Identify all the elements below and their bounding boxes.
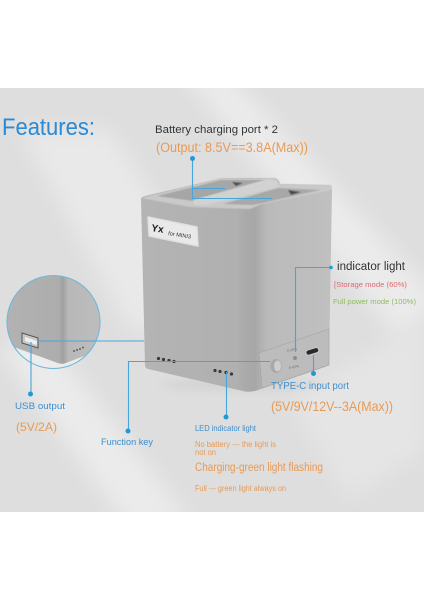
callout dots (28, 156, 333, 434)
callout lines (31, 158, 331, 431)
label: indicator light: indicator light (337, 261, 406, 273)
label: battery charging port: (Output: 8.5V==3.8A(Max)) (156, 140, 308, 155)
label: battery charging port (155, 124, 308, 155)
label: LED indicator light (195, 424, 323, 493)
inset circle: USB port close-up (6, 275, 100, 369)
box body silhouette (141, 178, 332, 392)
LED dots right (213, 369, 233, 376)
label: function key: Function key (101, 437, 153, 448)
label: TYPE-C input port (271, 380, 393, 414)
charger box: 0-30% (286, 347, 298, 353)
port panel (259, 329, 329, 388)
function button (270, 359, 282, 373)
sticker label (148, 217, 198, 246)
LED dots left (157, 357, 176, 363)
label: USB output: (5V/2A) (16, 420, 57, 434)
label: LED indicator light: not on (195, 448, 216, 457)
label: LED indicator light: No battery --- the light is (195, 440, 276, 449)
sticker label: for MINI3 (168, 231, 191, 241)
label: LED indicator light: Full --- green light always on (195, 484, 286, 493)
label: LED indicator light: Charging-green light flashing (195, 462, 323, 474)
charger box (141, 178, 332, 392)
label: TYPE-C input port: TYPE-C input port (271, 380, 349, 392)
background panel (0, 70, 424, 530)
box top with charging wells (141, 178, 332, 209)
label: indicator light: Full power mode (100%) (333, 297, 417, 306)
label: indicator light: [Storage mode (60%) (334, 280, 408, 289)
label: LED indicator light: LED indicator light (195, 424, 257, 433)
label: battery charging port: Battery charging port * 2 (155, 124, 278, 136)
label: USB output (15, 401, 65, 434)
sticker label: Yx (151, 223, 165, 236)
charger box: 8-60% (288, 364, 300, 370)
label: indicator light (333, 261, 417, 306)
label: TYPE-C input port: (5V/9V/12V--3A(Max)) (271, 398, 393, 414)
heading: Features: Features: (2, 114, 95, 141)
small indicator LED (293, 356, 297, 360)
label: USB output: USB output (15, 401, 65, 412)
USB-C port (305, 347, 319, 356)
